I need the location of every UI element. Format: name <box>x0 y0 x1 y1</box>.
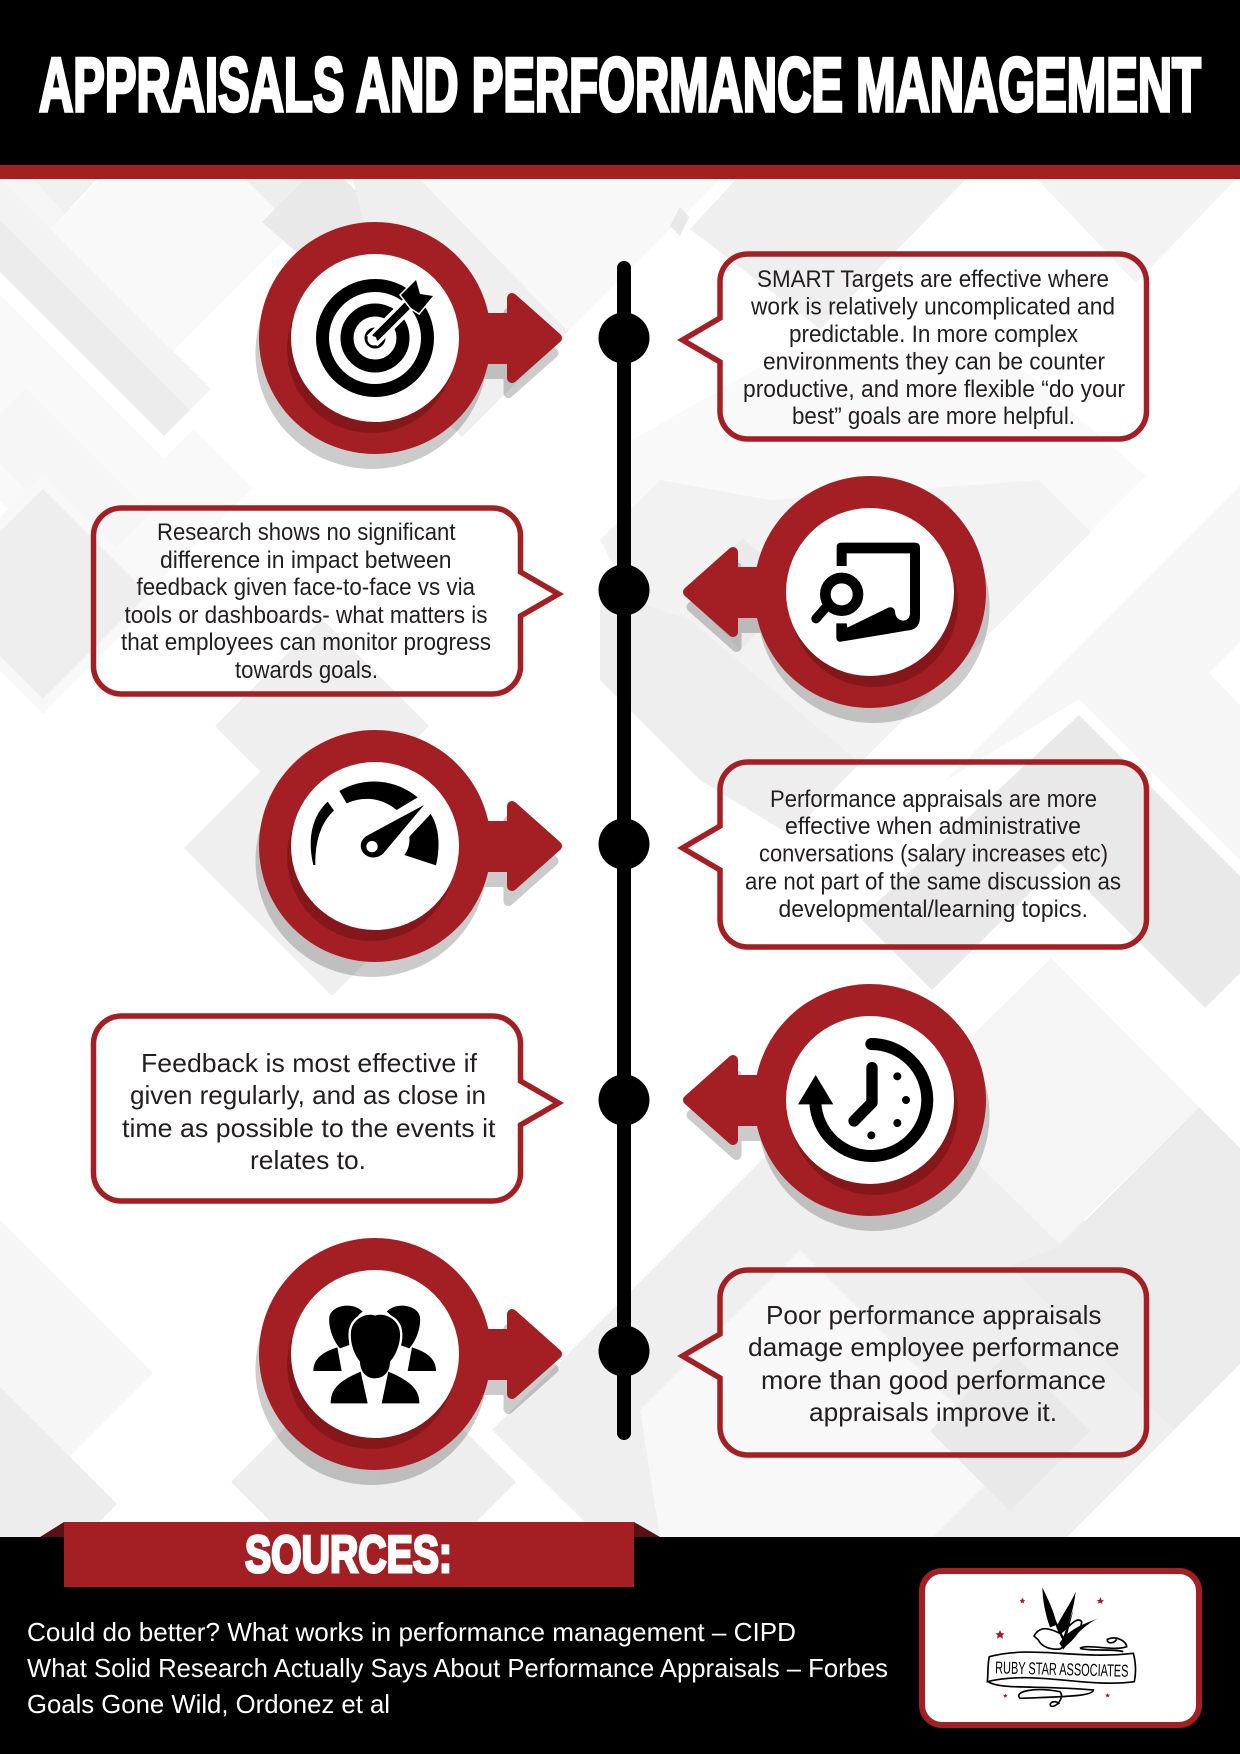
callout: poor appraisals: damage employee performance <box>748 1332 1120 1362</box>
panel: row 5 badge <box>256 1238 557 1485</box>
callout: poor appraisals: more than good performance <box>761 1365 1106 1395</box>
logo: Ruby Star Associates swallow and banner <box>987 1587 1135 1706</box>
callout: poor appraisals: Poor performance appraisals <box>766 1300 1102 1330</box>
icon: group of people <box>313 1306 436 1403</box>
callout: SMART targets <box>682 254 1146 439</box>
panel: row 1 badge <box>256 222 557 469</box>
callout: feedback tools <box>94 508 558 694</box>
callout: appraisal separation: are not part of the same discussion as <box>745 868 1121 896</box>
header band <box>0 0 1240 179</box>
callout: poor appraisals: appraisals improve it. <box>809 1397 1057 1427</box>
icon: document with magnifier <box>816 543 920 642</box>
sources list <box>27 1617 888 1719</box>
logo: Ruby Star Associates swallow and banner: RUBY STAR ASSOCIATES <box>995 1657 1129 1681</box>
callout: feedback tools: towards goals. <box>235 657 378 684</box>
callout: feedback tools: that employees can monitor progress <box>121 629 491 656</box>
callout: SMART targets: environments they can be counter <box>763 348 1105 376</box>
callout: feedback tools: Research shows no significant <box>157 519 456 546</box>
callout: feedback tools: feedback given face-to-face vs via <box>136 574 476 601</box>
sources list: Goals Gone Wild, Ordonez et al <box>27 1689 390 1719</box>
callout: SMART targets: best” goals are more helpful. <box>792 403 1075 430</box>
icon: target with arrow <box>322 280 433 390</box>
callout: appraisal separation: effective when administrative <box>785 813 1081 840</box>
callout: appraisal separation: conversations (salary increases etc) <box>759 840 1108 868</box>
timeline line <box>598 268 650 1433</box>
callout: appraisal separation <box>682 762 1146 947</box>
panel: row 3 badge <box>256 730 557 977</box>
callout: SMART targets: work is relatively uncomplicated and <box>750 294 1115 320</box>
icon: speedometer gauge <box>311 781 439 865</box>
callout: regular feedback: Feedback is most effective if <box>141 1048 478 1078</box>
sources ribbon <box>40 1522 660 1587</box>
callout: regular feedback <box>94 1016 558 1201</box>
callout: SMART targets: predictable. In more complex <box>789 321 1078 348</box>
callout: feedback tools: tools or dashboards- what matters is <box>124 602 488 629</box>
callout: SMART targets: SMART Targets are effective where <box>757 266 1109 293</box>
callout: SMART targets: productive, and more flexible “do your <box>743 376 1125 403</box>
footer band <box>0 1537 1240 1754</box>
sources heading: SOURCES: <box>245 1526 452 1584</box>
logo panel <box>922 1571 1199 1725</box>
panel: row 2 badge <box>688 476 990 723</box>
callout: regular feedback: relates to. <box>250 1145 366 1175</box>
sources list: Could do better? What works in performance management – CIPD <box>27 1617 796 1647</box>
callout: regular feedback: given regularly, and as close in <box>130 1080 486 1110</box>
callout: feedback tools: difference in impact between <box>160 547 452 574</box>
icon: clock with return arrow <box>798 1044 927 1156</box>
callout: appraisal separation: developmental/learning topics. <box>778 896 1088 923</box>
panel: row 4 badge <box>688 984 990 1231</box>
callout: regular feedback: time as possible to the events it <box>122 1113 496 1143</box>
callout: poor appraisals <box>682 1270 1146 1455</box>
callout: appraisal separation: Performance appraisals are more <box>770 786 1097 813</box>
sources list: What Solid Research Actually Says About Performance Appraisals – Forbes <box>27 1653 888 1683</box>
